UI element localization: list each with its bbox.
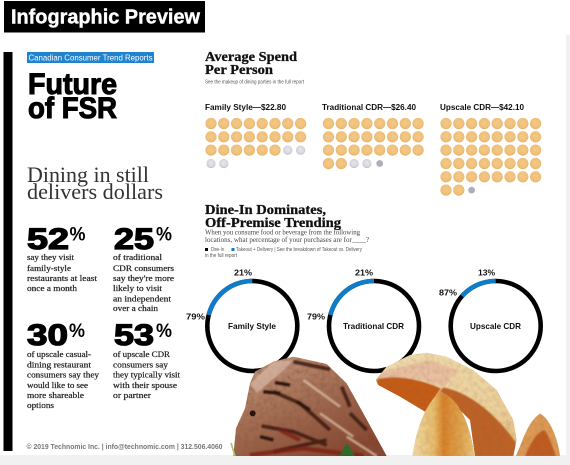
stat: 30%: more shareable bbox=[27, 391, 84, 400]
header banner: Infographic Preview: Infographic Preview bbox=[11, 6, 200, 28]
heading: Average Spend Per Person: Per Person bbox=[205, 62, 273, 77]
stat: 52% bbox=[27, 223, 98, 293]
subheading: Dining in still bbox=[27, 162, 149, 187]
left black bar bbox=[4, 52, 12, 451]
survey question bbox=[205, 228, 369, 244]
heading: Average Spend Per Person: See the makeup of dining parties in the full report bbox=[205, 80, 305, 86]
coin label: Family Style: Family Style—$22.80 bbox=[205, 103, 287, 112]
donut chart: Traditional CDR: 79% bbox=[307, 312, 326, 322]
coin label: Traditional CDR: Traditional CDR—$26.40 bbox=[322, 103, 417, 112]
stat: 53%: or partner bbox=[113, 391, 151, 400]
coins: Upscale CDR bbox=[440, 118, 541, 196]
legend bbox=[205, 247, 362, 259]
donut chart: Traditional CDR: 21% bbox=[355, 268, 374, 278]
stat: 25%: likely to visit bbox=[113, 284, 163, 293]
stat: 30% bbox=[27, 319, 100, 410]
coin label: Upscale CDR: Upscale CDR—$42.10 bbox=[440, 103, 525, 112]
stat: 30%: consumers say they bbox=[27, 370, 100, 380]
subheading: delivers dollars bbox=[27, 179, 163, 204]
stat: 52%: 52 bbox=[27, 223, 69, 256]
footer: © 2019 Technomic Inc. | info@technomic.com | 312.506.4060 bbox=[26, 442, 222, 451]
stat: 25%: 25 bbox=[114, 223, 154, 256]
header banner: Infographic Preview bbox=[4, 1, 205, 32]
legend: Takeout + Delivery | See the breakdown of Takeout vs. Delivery bbox=[236, 247, 362, 253]
donut chart: Family Style bbox=[186, 268, 297, 371]
stat: 25%: of traditional bbox=[113, 253, 163, 262]
main title: Future bbox=[28, 68, 117, 101]
stat: 25%: an independent bbox=[113, 294, 172, 304]
main title bbox=[28, 68, 117, 125]
stat: 53%: consumers say bbox=[113, 360, 169, 370]
heading: Average Spend Per Person bbox=[205, 49, 305, 86]
donut chart: Upscale CDR: 13% bbox=[478, 268, 496, 278]
heading: Average Spend Per Person: Average Spend bbox=[205, 49, 297, 64]
stat: 52%: restaurants at least bbox=[27, 274, 98, 283]
coins: Traditional CDR bbox=[323, 118, 424, 169]
food photo: herb sprig bbox=[231, 443, 235, 456]
stat: 30%: dining restaurant bbox=[27, 360, 92, 370]
survey question: locations, what percentage of your purchases are for____? bbox=[205, 236, 369, 244]
donut chart: Upscale CDR: Upscale CDR bbox=[470, 322, 521, 331]
donut chart: Upscale CDR bbox=[439, 268, 541, 371]
stat: 52%: % bbox=[70, 224, 86, 246]
stat: 52%: once a month bbox=[27, 284, 78, 293]
stat: 25% bbox=[113, 223, 174, 313]
stat: 52%: say they visit bbox=[27, 253, 75, 262]
stat: 30%: options bbox=[27, 401, 54, 410]
food photo: potato wedges bbox=[373, 350, 563, 457]
stat: 25%: say they're more bbox=[113, 274, 174, 283]
stat: 30%: % bbox=[69, 321, 85, 342]
food photo: grilled steak bbox=[230, 353, 390, 457]
heading: Dine-In Dominates: Off-Premise Trending bbox=[205, 215, 341, 230]
stat: 53%: % bbox=[156, 321, 172, 342]
main title: of FSR bbox=[28, 92, 117, 125]
stat: 53%: of upscale CDR bbox=[113, 350, 170, 359]
survey question: When you consume food or beverage from the following bbox=[205, 228, 360, 236]
stat: 25%: CDR consumers bbox=[113, 264, 174, 273]
donut chart: Family Style: 21% bbox=[234, 268, 253, 278]
report tag: Canadian Consumer Trend Reports bbox=[28, 52, 152, 62]
donut chart: Upscale CDR: 87% bbox=[439, 288, 458, 298]
donut chart: Family Style: 79% bbox=[186, 312, 206, 322]
stat: 25%: % bbox=[156, 224, 172, 246]
stat: 53%: 53 bbox=[114, 319, 154, 352]
coins: Family Style bbox=[205, 118, 306, 168]
donut chart: Traditional CDR: Traditional CDR bbox=[343, 322, 404, 331]
stat: 30%: 30 bbox=[27, 319, 68, 352]
stat: 53%: with their spouse bbox=[113, 381, 177, 390]
stat: 53% bbox=[113, 319, 181, 400]
legend: Dine-In bbox=[211, 247, 224, 253]
stat: 30%: would like to see bbox=[27, 381, 88, 390]
stat: 25%: over a chain bbox=[113, 304, 159, 313]
legend: in the full report bbox=[205, 253, 238, 259]
heading: Dine-In Dominates: Dine-In Dominates, bbox=[205, 202, 326, 217]
donut chart: Traditional CDR bbox=[307, 268, 419, 371]
heading: Dine-In Dominates bbox=[205, 202, 341, 230]
stat: 53%: they typically visit bbox=[113, 370, 181, 380]
donut chart: Family Style: Family Style bbox=[228, 322, 276, 331]
stat: 52%: family-style bbox=[27, 264, 71, 273]
subheading bbox=[27, 162, 163, 204]
stat: 30%: of upscale casual- bbox=[27, 350, 91, 359]
